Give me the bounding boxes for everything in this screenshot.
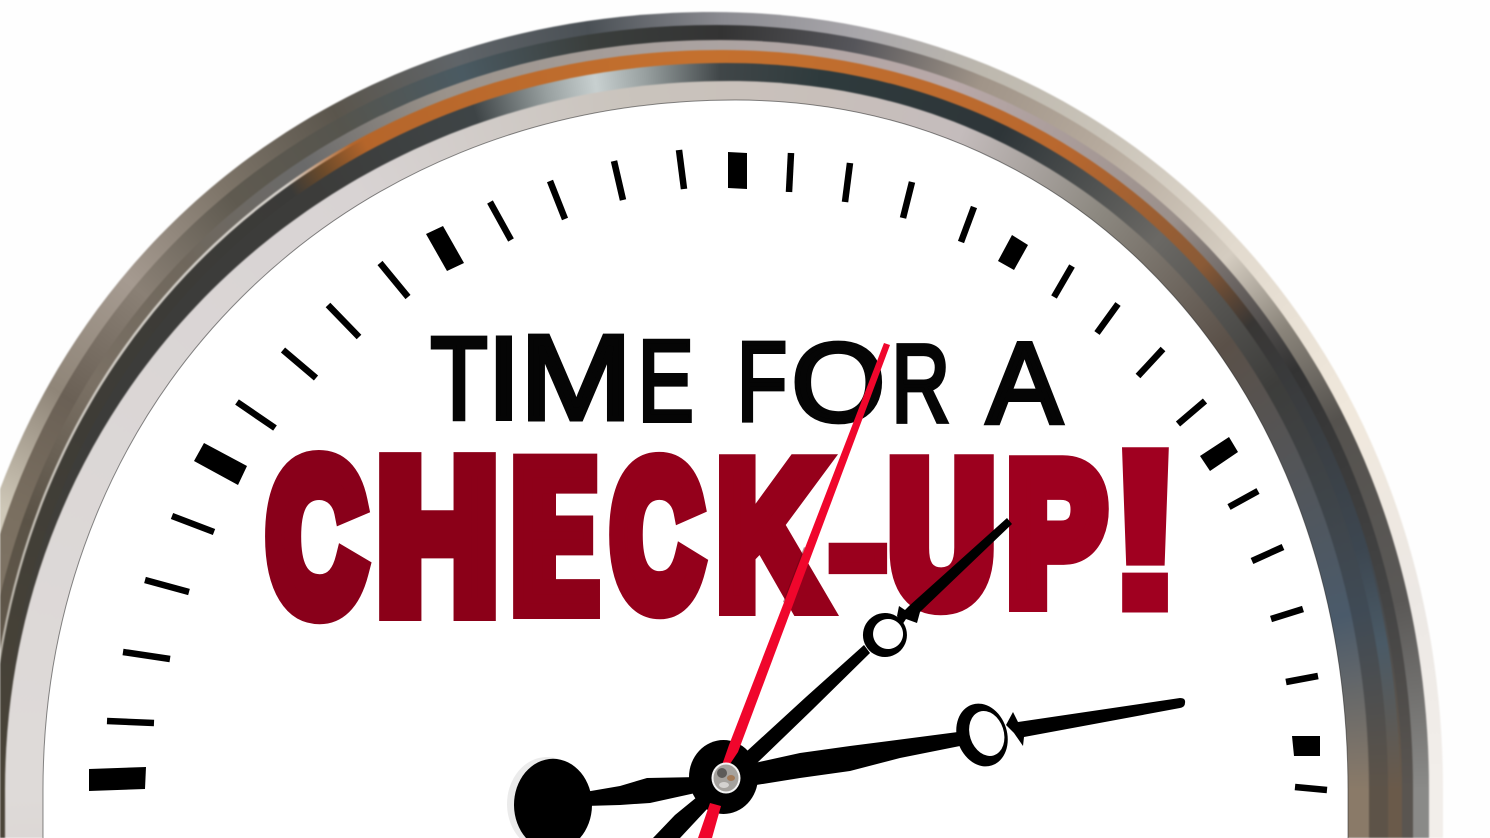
red second hand tail: [698, 803, 721, 838]
heading: CHECK-UP!: C: [612, 424, 701, 648]
heading: TIME FOR A: E: [638, 317, 694, 446]
minute hand: [746, 518, 1012, 764]
clock hands: [507, 343, 1185, 838]
heading: CHECK-UP!: [268, 404, 1187, 658]
counterweight shadow: [507, 757, 587, 838]
heading: CHECK-UP!: K: [716, 421, 825, 650]
heading: TIME FOR A: F: [737, 319, 787, 445]
hour hand: [750, 697, 1185, 786]
red second hand: [722, 343, 890, 770]
heading: CHECK-UP!: E: [509, 414, 600, 658]
center pin: [712, 762, 740, 794]
heading: CHECK-UP!: U: [891, 426, 993, 641]
rim band: inner dark groove: [302, 62, 1388, 838]
counterweight tail: [514, 759, 708, 838]
minute and hour tick marks: [89, 150, 1327, 791]
heading: CHECK-UP!: H: [377, 419, 498, 655]
heading: CHECK-UP!: -: [828, 453, 888, 636]
hub: [689, 740, 758, 814]
heading: CHECK-UP!: C: [268, 421, 364, 654]
heading: TIME FOR A: T: [431, 315, 487, 444]
heading: TIME FOR A: I: [487, 313, 521, 443]
heading: TIME FOR A: M: [520, 311, 632, 445]
heading: CHECK-UP!: P: [1008, 425, 1105, 642]
heading: CHECK-UP!: !: [1104, 404, 1187, 656]
heading: TIME FOR A: O: [791, 320, 885, 445]
clock face: [43, 100, 1348, 838]
rim band: copper reflection: [0, 143, 1397, 838]
heading: TIME FOR A: R: [892, 321, 950, 446]
heading: TIME FOR A: [431, 311, 1062, 448]
red hand shadow on K: [783, 547, 812, 606]
heading: TIME FOR A: A: [987, 319, 1062, 448]
